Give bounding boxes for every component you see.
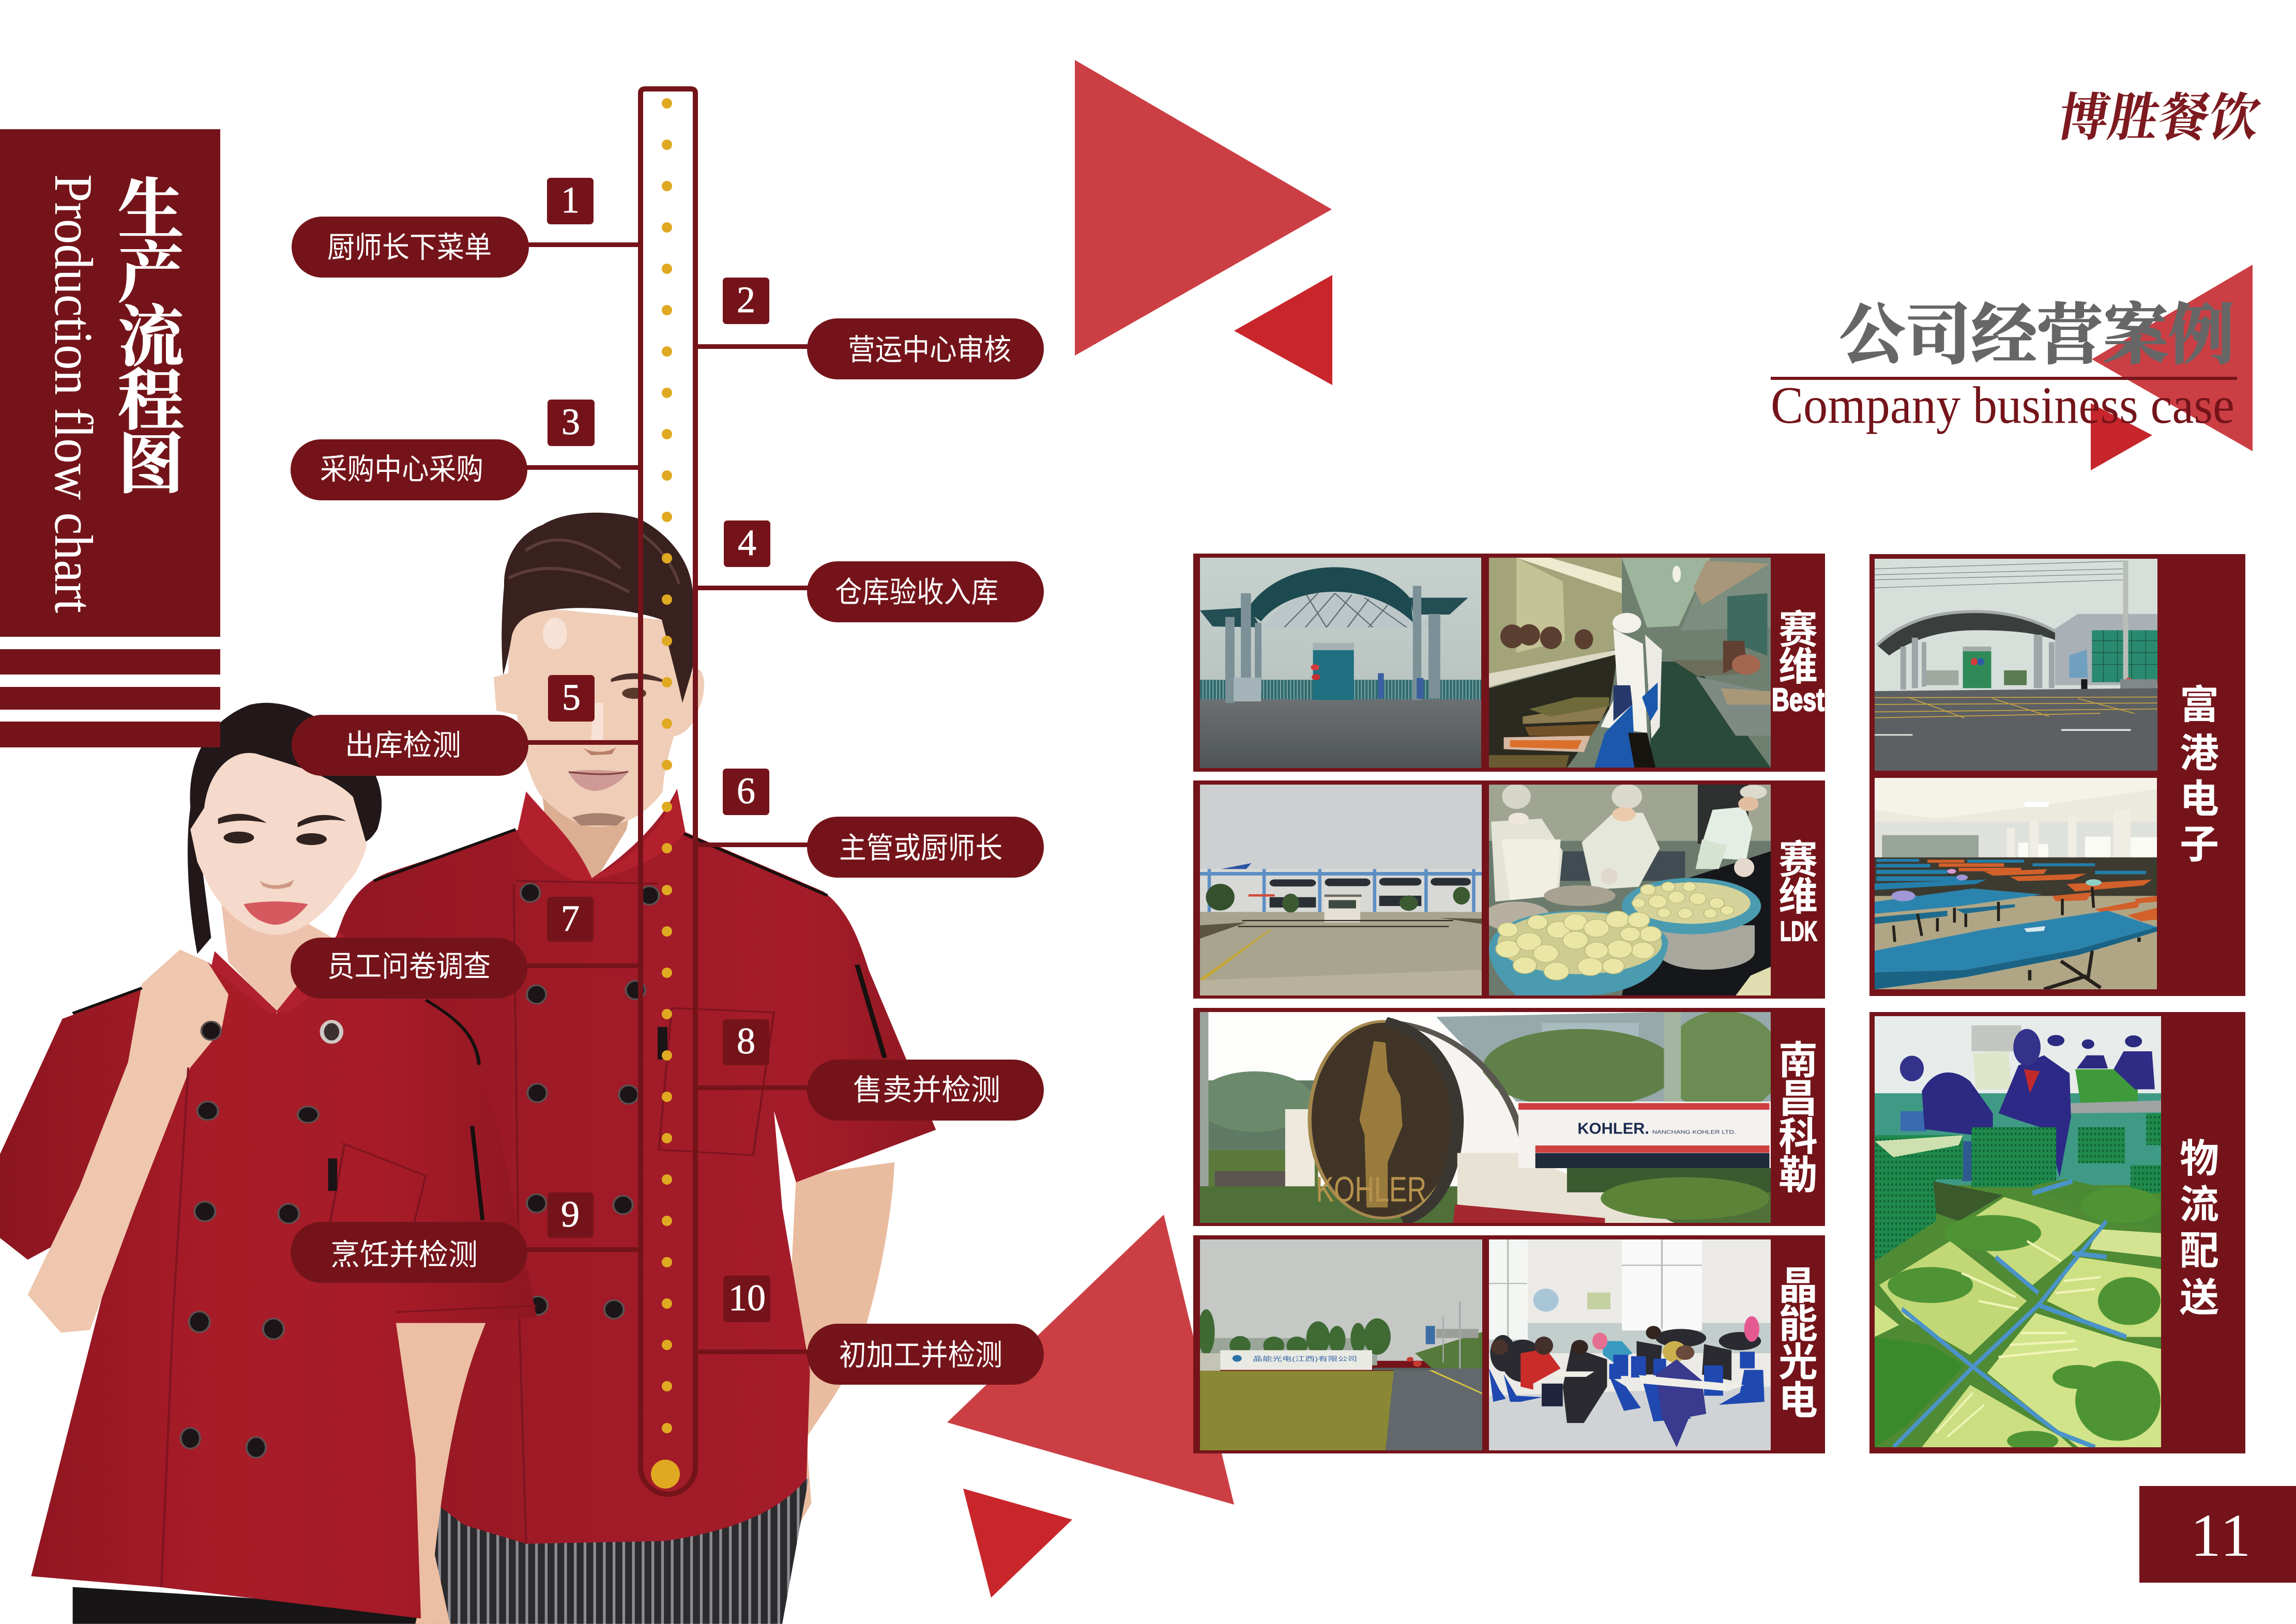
heading: 公司经营案例: 公司经营案例 [1839, 299, 2234, 372]
panel: 赛维 Best [1193, 554, 1825, 772]
label: LDK: LDK [1780, 916, 1817, 947]
male chef face [494, 610, 704, 827]
heading: Company business case: Company business case [1771, 376, 2234, 435]
page number [2139, 1486, 2296, 1583]
logo: 博胜餐饮: 博胜餐饮 [2054, 89, 2265, 147]
step 5: 出库检测: 5 [562, 677, 581, 718]
female chef placket and pocket [161, 1067, 537, 1587]
female chef left forearm and hand [28, 949, 229, 1332]
female chef collar [211, 932, 342, 1014]
page number: 11 [2191, 1502, 2253, 1569]
photo: vegetable logistics [1875, 1016, 2161, 1447]
step 1: 厨师长下菜单: 厨师长下菜单 [327, 231, 492, 264]
decorative triangle: top centre small [1234, 275, 1332, 385]
stripe one [0, 649, 220, 675]
label: Best: Best [1772, 682, 1824, 718]
step 10: 初加工并检测: 10 [728, 1277, 766, 1319]
step 7: 员工问卷调查: 7 [561, 898, 580, 939]
panel: 物流配送 [1869, 1012, 2245, 1453]
label: 赛维: 赛维 [1778, 838, 1818, 919]
panel: production flow chart title [0, 129, 220, 747]
step 8: 售卖并检测: 售卖并检测 [853, 1074, 1000, 1107]
title panel background [0, 129, 220, 637]
heading rule [1771, 377, 2237, 380]
male chef buttons [521, 883, 659, 1319]
female chef lips [244, 901, 308, 925]
step 8: 售卖并检测 [695, 1019, 1044, 1121]
male chef goatee [572, 813, 626, 825]
decorative triangle: bottom centre small [963, 1489, 1072, 1598]
heading: English title: Production flow chart [43, 174, 104, 613]
step 3: 采购中心采购 [291, 400, 640, 500]
panel: 富港电子 [1869, 554, 2245, 996]
step 7: 员工问卷调查 [291, 897, 640, 999]
female chef eyebrows and eyes [218, 814, 346, 845]
photo: employees in dining hall [1489, 1239, 1771, 1450]
male chef trousers [415, 1479, 809, 1624]
step 9: 烹饪并检测 [291, 1192, 640, 1283]
photo: Lattice Power entrance: 晶能光电(江西)有限公司 [1253, 1355, 1357, 1362]
label: 赛维: 赛维 [1778, 608, 1818, 689]
male chef lips [569, 770, 628, 791]
step 3: 采购中心采购: 采购中心采购 [320, 453, 483, 486]
male chef eyebrow and eye [611, 673, 663, 682]
photo: Kohler entrance: NANCHANG KOHLER LTD. [1652, 1128, 1736, 1135]
decorative triangle: top centre large [1075, 60, 1332, 356]
step 8: 售卖并检测: 8 [737, 1020, 755, 1062]
stripe two [0, 687, 220, 710]
step 2: 营运中心审核: 营运中心审核 [848, 333, 1011, 366]
step 3: 采购中心采购: 3 [561, 401, 580, 442]
female chef neck [221, 905, 332, 1014]
step 5: 出库检测 [292, 675, 640, 776]
photo: industrial park gate [1200, 558, 1481, 768]
photo: canteen service line [1489, 558, 1771, 768]
photo: Kohler entrance: KOHLER [1316, 1169, 1426, 1209]
photo: empty canteen [1875, 778, 2157, 989]
male chef hair [501, 513, 696, 703]
male chef piping and pocket [374, 830, 885, 1058]
label: 南昌科勒: 南昌科勒 [1778, 1039, 1818, 1198]
photo: LDK factory [1200, 785, 1482, 995]
photo: Kohler entrance: KOHLER. [1577, 1120, 1649, 1137]
male chef face highlights [543, 618, 567, 649]
female chef right arm [394, 1308, 488, 1624]
stripe three [0, 722, 220, 747]
decorative triangle: bottom centre large [947, 1215, 1234, 1505]
female chef jacket [0, 932, 537, 1618]
female chef buttons [180, 1021, 318, 1458]
label: 富港电子: 富港电子 [2180, 683, 2219, 867]
female chef face [190, 753, 367, 935]
photo: Kohler entrance [1200, 1012, 1771, 1223]
female chef nose [260, 880, 294, 889]
female chef trousers [73, 1587, 419, 1624]
photo: Lattice Power entrance [1200, 1239, 1482, 1450]
step 10: 初加工并检测: 初加工并检测 [839, 1339, 1002, 1372]
photo figure: female chef [0, 703, 537, 1624]
step 1: 厨师长下菜单 [292, 178, 640, 278]
male chef nose shadow [583, 747, 616, 755]
step 1: 厨师长下菜单: 1 [561, 179, 580, 221]
panel: 南昌科勒 [1193, 1008, 1825, 1226]
heading: Chinese title: 生产流程图 [118, 174, 185, 501]
male chef collar shading [518, 789, 686, 881]
step 7: 员工问卷调查: 员工问卷调查 [327, 950, 491, 983]
female chef piping [73, 988, 482, 1220]
photo: onion preparation [1489, 785, 1771, 995]
step 9: 烹饪并检测: 9 [561, 1193, 580, 1235]
step 2: 营运中心审核: 2 [737, 279, 755, 320]
step 6: 主管或厨师长: 6 [737, 770, 755, 811]
panel: 晶能光电 [1193, 1235, 1825, 1453]
tube outline [641, 89, 695, 1494]
chart: process flow tube with dots [641, 89, 695, 1494]
tube dots [662, 98, 672, 1433]
male chef jacket [277, 789, 936, 1544]
tube end dot [651, 1460, 680, 1489]
label: 物流配送: 物流配送 [2180, 1137, 2219, 1320]
panel: 赛维 LDK [1193, 780, 1825, 999]
decorative triangle: top right small [2091, 403, 2152, 470]
step 4: 仓库验收入库: 仓库验收入库 [835, 576, 998, 609]
step 5: 出库检测: 出库检测 [345, 729, 461, 762]
step 4: 仓库验收入库 [695, 520, 1044, 622]
female chef hair [188, 703, 382, 954]
step 4: 仓库验收入库: 4 [738, 522, 756, 563]
step 9: 烹饪并检测: 烹饪并检测 [330, 1238, 478, 1271]
decorative triangle: top right large [2092, 265, 2253, 451]
photo: Fugang entrance gate [1875, 559, 2157, 771]
step 6: 主管或厨师长 [695, 769, 1044, 878]
step 10: 初加工并检测 [695, 1276, 1044, 1385]
label: 晶能光电: 晶能光电 [1778, 1264, 1818, 1423]
photo figure: male chef [277, 513, 936, 1624]
step 2: 营运中心审核 [695, 278, 1044, 379]
male chef neck [537, 743, 644, 881]
step 6: 主管或厨师长: 主管或厨师长 [839, 832, 1002, 865]
male chef right arm [755, 1162, 894, 1555]
